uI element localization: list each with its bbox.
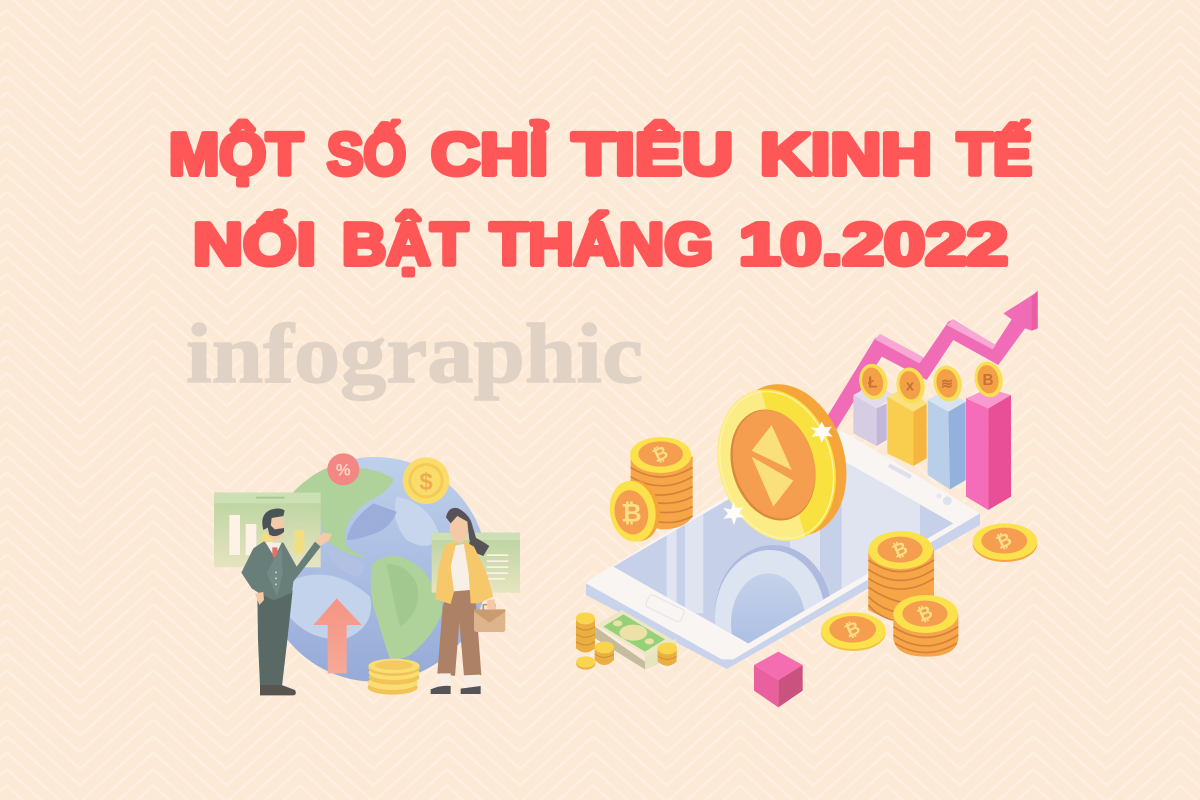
title: TIÊU	[572, 120, 733, 188]
chart panel left	[214, 493, 321, 567]
icon: dollar coin: $	[419, 468, 433, 495]
bar: yellow	[887, 387, 927, 466]
watermark word: infographic: infographic	[186, 307, 643, 401]
icon: bar coins	[856, 359, 1006, 406]
title: 10.2022	[739, 210, 1008, 278]
bar: pink	[966, 388, 1011, 510]
icon: bar coins: Ł	[868, 374, 877, 391]
coin: flat right: ₿	[993, 529, 1015, 553]
phone	[586, 432, 980, 683]
coin stack: top left	[630, 437, 693, 529]
coin: left standing: ₿	[621, 499, 642, 527]
chart panel right	[432, 533, 520, 593]
coin stack: right tall: ₿	[889, 538, 911, 562]
illustration: crypto phone scene	[576, 291, 1038, 707]
coin: flat centre: ₿	[842, 617, 863, 642]
banknotes and small coins	[576, 610, 677, 670]
big ethereum coin	[717, 384, 846, 541]
icon: bar coins: B	[982, 372, 994, 389]
coin stack: top left: ₿	[649, 442, 671, 466]
icon: up arrow	[313, 598, 362, 673]
title: NỔI	[193, 210, 316, 278]
title: TẾ	[957, 120, 1032, 188]
coin stack: right tall	[868, 531, 934, 620]
sparkles	[723, 422, 833, 525]
coin stack: right short	[893, 595, 958, 657]
icon: bar coins: ≋	[941, 377, 953, 393]
title: CHỈ	[431, 120, 548, 188]
coin: flat centre	[821, 612, 886, 651]
phone screen	[614, 462, 954, 644]
title: SỐ	[327, 120, 406, 188]
title: BẬT	[342, 210, 468, 278]
icon: percent badge	[327, 453, 359, 485]
bar: blue	[928, 390, 966, 489]
icon: percent badge: %	[336, 460, 351, 479]
coin stack: right short: ₿	[914, 602, 936, 626]
figure: businessman	[241, 508, 332, 695]
title	[169, 120, 1032, 278]
icon: coin stack	[368, 659, 420, 695]
title: THÁNG	[490, 210, 713, 278]
title: MỘT	[169, 120, 303, 188]
globe	[287, 457, 483, 682]
icon: dollar coin	[403, 457, 449, 504]
bar: purple	[853, 383, 895, 446]
figure: businesswoman	[431, 508, 505, 694]
illustration: business people and globe	[214, 453, 520, 695]
icon: bar coins: x	[906, 379, 915, 395]
coin: left standing	[605, 477, 664, 545]
pink cube	[754, 652, 803, 707]
growth arrow	[826, 291, 1038, 432]
coin: flat right	[973, 523, 1037, 562]
title: KINH	[760, 120, 932, 188]
